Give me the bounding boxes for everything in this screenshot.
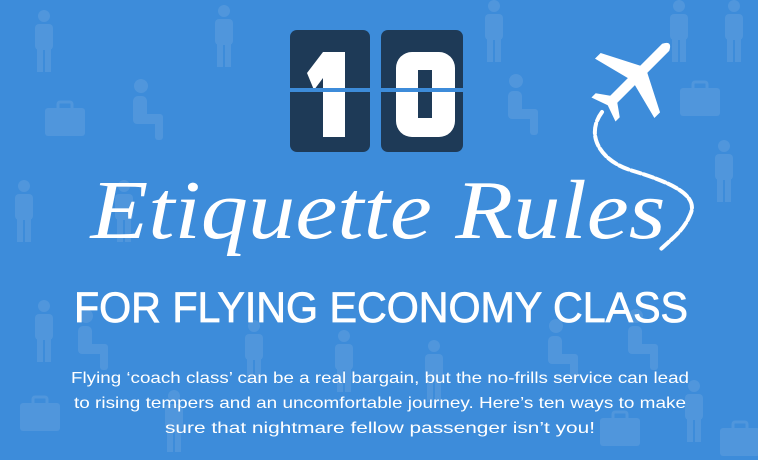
intro paragraph: to rising tempers and an uncomfortable journey. Here’s ten ways to make — [74, 395, 686, 412]
intro paragraph: Flying ‘coach class’ can be a real bargain, but the no-frills service can lead — [71, 370, 689, 387]
title: Etiquette Rules: Etiquette Rules — [89, 164, 665, 257]
icon: airplane with trail — [574, 14, 699, 250]
subtitle: FOR FLYING ECONOMY CLASS — [74, 284, 688, 332]
number cards: 10 — [286, 30, 468, 152]
intro paragraph — [71, 370, 689, 437]
intro paragraph: sure that nightmare fellow passenger isn’t you! — [165, 420, 595, 437]
